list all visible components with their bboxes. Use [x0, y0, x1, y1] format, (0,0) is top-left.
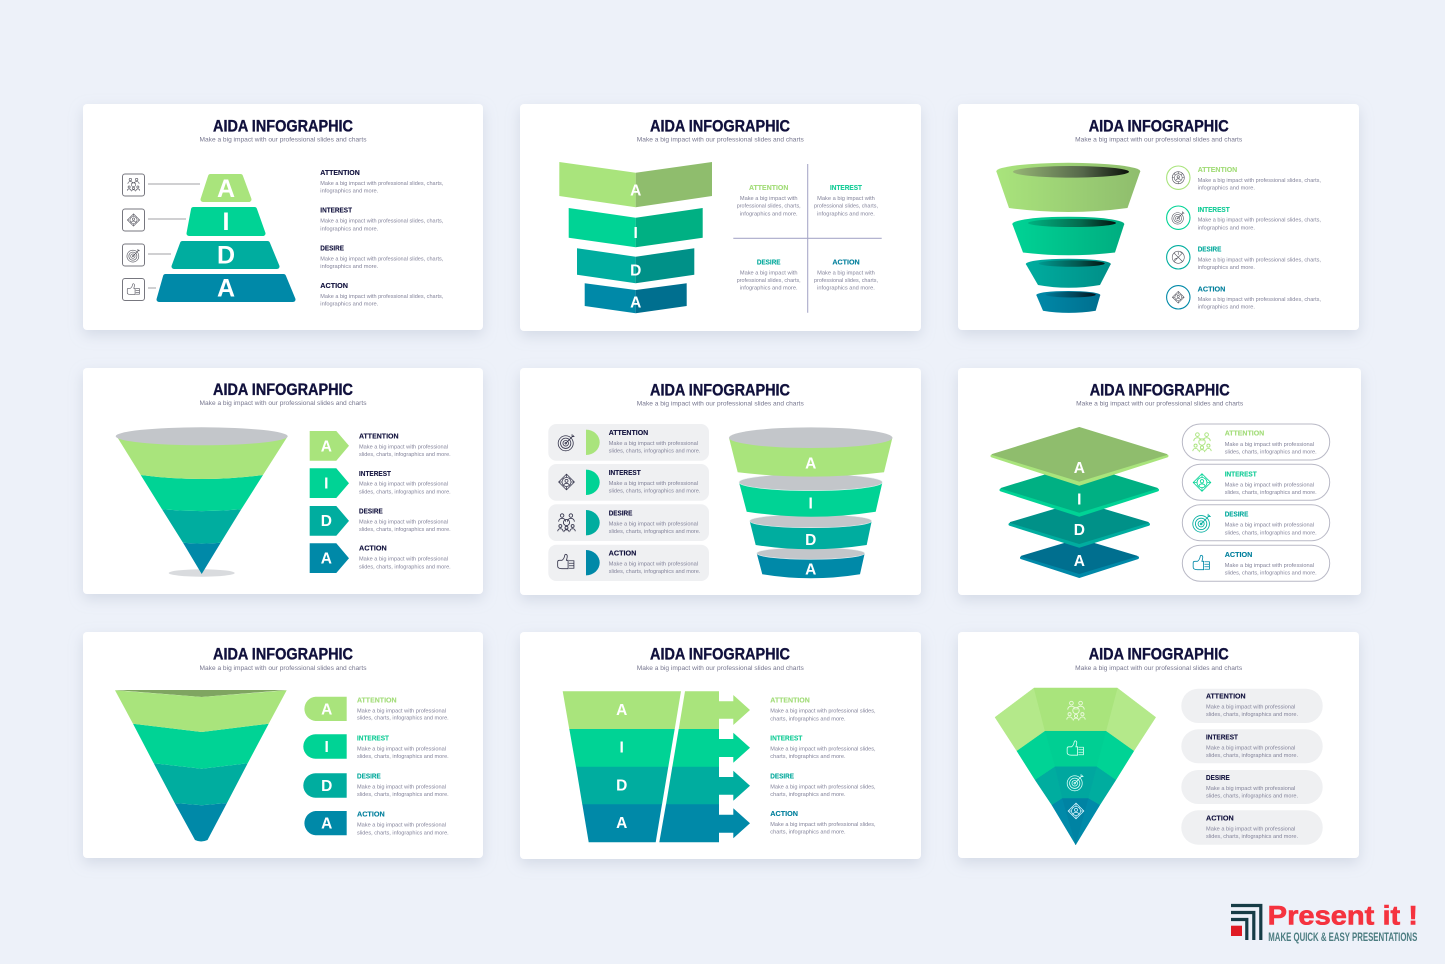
text: interest: infographics and more. — [817, 211, 875, 217]
text: attention: Make a big impact with professional — [1206, 705, 1295, 711]
diamond stack: A — [1074, 460, 1085, 477]
rounded tags: A — [321, 702, 332, 719]
text: desire — [737, 257, 801, 292]
text: interest — [770, 733, 876, 760]
circle icons — [1167, 166, 1190, 309]
text: action: Make a big impact with professional — [1225, 563, 1314, 569]
text: desire: Make a big impact with professional — [1225, 523, 1314, 529]
text: action: ACTION — [357, 810, 385, 819]
text: interest: slides, charts, infographics and more. — [1225, 490, 1317, 496]
logo: Present it — [1231, 900, 1418, 944]
text: desire — [1198, 245, 1321, 271]
panel 1: stacked pyramid — [83, 104, 483, 330]
text: attention: ATTENTION — [1225, 429, 1264, 438]
text: attention: infographics and more. — [740, 211, 798, 217]
text: desire — [357, 772, 449, 798]
title: AIDA INFOGRAPHIC — [213, 646, 353, 664]
text: action: Make a big impact with professional slides, charts, — [320, 294, 444, 300]
text: interest: slides, charts, infographics and more. — [1206, 753, 1298, 759]
text: desire: DESIRE — [320, 243, 344, 252]
text: attention — [770, 696, 876, 722]
subtitle: Make a big impact with our professional slides and charts — [200, 137, 366, 144]
gem chart — [995, 688, 1156, 845]
text: action — [1206, 813, 1298, 840]
subtitle: Make a big impact with our professional slides and charts — [637, 665, 804, 672]
text: interest: Make a big impact with professional slides, charts, — [1198, 218, 1321, 224]
text: action: slides, charts, infographics and more. — [1206, 834, 1298, 840]
text: desire: Make a big impact with professional slides, charts, — [1198, 257, 1321, 263]
text: attention: professional slides, charts, — [737, 204, 801, 210]
chevron stack — [559, 162, 712, 313]
text: attention — [1206, 692, 1298, 718]
panel 5: gray rows and funnel rings — [520, 368, 921, 595]
text: action: Make a big impact with professional — [609, 561, 698, 567]
text: desire — [320, 243, 444, 270]
split funnel: D — [616, 777, 627, 794]
text: desire — [359, 506, 451, 533]
text: interest: slides, charts, infographics and more. — [359, 489, 451, 495]
text: desire: infographics and more. — [1198, 265, 1255, 271]
text: interest — [1225, 469, 1317, 496]
gray pills — [1181, 689, 1323, 845]
text: interest — [320, 206, 444, 232]
split funnel: A — [616, 702, 627, 719]
text: interest: slides, charts, infographics and more. — [609, 489, 701, 495]
text: interest: charts, infographics and more. — [770, 754, 846, 760]
text: action: slides, charts, infographics and more. — [1225, 571, 1317, 577]
panel 4: inverted cone — [83, 368, 483, 594]
title: AIDA INFOGRAPHIC — [213, 118, 353, 136]
text: attention: Make a big impact with professional — [359, 444, 448, 450]
text: action: Make a big impact with professional — [359, 557, 448, 563]
chevron stack: A — [630, 294, 641, 311]
text: interest — [1198, 205, 1321, 231]
text: action: ACTION — [770, 809, 798, 818]
text: attention: slides, charts, infographics and more. — [1225, 449, 1317, 455]
text: action: Make a big impact with professional — [1206, 826, 1295, 832]
text: action: Make a big impact with professional slides, charts, — [1198, 297, 1321, 303]
text: desire: DESIRE — [1225, 510, 1249, 519]
text: action: ACTION — [1225, 550, 1252, 559]
funnel rings: A — [805, 561, 816, 578]
text: attention: slides, charts, infographics and more. — [1206, 712, 1298, 718]
pyramid chart: I — [223, 208, 229, 236]
funnel rings: D — [805, 532, 816, 549]
split funnel: A — [616, 815, 627, 832]
text: desire: infographics and more. — [740, 286, 798, 292]
text: attention: Make a big impact with professional — [609, 441, 698, 447]
text: desire: DESIRE — [609, 508, 633, 517]
text: attention: Make a big impact with professional — [1225, 442, 1314, 448]
text: interest: INTEREST — [1206, 732, 1239, 741]
subtitle: Make a big impact with our professional slides and charts — [200, 400, 366, 407]
panel 9: gem funnel — [958, 632, 1359, 858]
text: action: charts, infographics and more. — [770, 830, 846, 836]
text: desire: professional slides, charts, — [737, 278, 801, 284]
text: desire: slides, charts, infographics and more. — [1206, 794, 1298, 800]
panel 2: folded chevrons — [520, 104, 921, 331]
text: action — [770, 809, 876, 836]
pyramid chart — [159, 175, 293, 302]
text: interest: Make a big impact with professional — [1206, 745, 1295, 751]
text: desire: Make a big impact with professional — [1206, 786, 1295, 792]
text: interest: Make a big impact with professional slides, — [770, 747, 876, 753]
text: attention — [1225, 429, 1317, 455]
panel 6: stacked diamonds — [958, 368, 1361, 595]
text: action — [357, 810, 449, 836]
title: AIDA INFOGRAPHIC — [213, 381, 353, 399]
text: interest: Make a big impact with professional slides, charts, — [320, 219, 444, 225]
diamond stack: D — [1074, 522, 1085, 539]
split funnel — [563, 691, 681, 842]
pyramid chart: D — [217, 242, 235, 270]
icon column with leader lines — [122, 174, 200, 300]
text: interest — [359, 469, 451, 495]
text: attention: charts, infographics and more. — [770, 716, 846, 722]
text: attention: ATTENTION — [609, 428, 648, 437]
subtitle: Make a big impact with our professional slides and charts — [200, 665, 366, 672]
text: desire: Make a big impact with professional — [609, 521, 698, 527]
chevron stack: A — [630, 182, 641, 200]
text: interest: professional slides, charts, — [814, 204, 878, 210]
text: action — [609, 548, 701, 575]
text: attention: ATTENTION — [320, 168, 360, 177]
text: desire: DESIRE — [359, 506, 383, 515]
text: action: ACTION — [359, 544, 387, 553]
text: attention — [737, 183, 801, 217]
text: action: infographics and more. — [320, 302, 379, 308]
panel 7: angular funnel — [83, 632, 483, 858]
funnel rings: A — [805, 455, 816, 472]
text: attention — [1198, 165, 1321, 192]
text: action — [814, 257, 878, 292]
text: desire: slides, charts, infographics and more. — [609, 529, 701, 535]
text: desire: Make a big impact with — [740, 270, 798, 276]
text: action: ACTION — [320, 281, 348, 290]
rounded tags — [303, 697, 347, 835]
text: attention: ATTENTION — [749, 183, 788, 192]
text: interest: slides, charts, infographics and more. — [357, 754, 449, 760]
rounded tags: D — [321, 778, 332, 795]
diamond stack — [992, 428, 1167, 576]
title: AIDA INFOGRAPHIC — [1090, 381, 1230, 399]
text: interest: Make a big impact with professional — [1225, 482, 1314, 488]
pyramid chart: A — [217, 274, 235, 302]
funnel rings: I — [809, 496, 813, 513]
text: attention: ATTENTION — [770, 696, 810, 705]
text: interest — [814, 183, 878, 217]
text: attention: ATTENTION — [357, 695, 396, 704]
row backgrounds with half circles and icons — [548, 424, 709, 581]
title: AIDA INFOGRAPHIC — [1089, 118, 1229, 136]
outlined pills with icons — [1182, 424, 1330, 581]
title: AIDA INFOGRAPHIC — [650, 118, 790, 136]
title: AIDA INFOGRAPHIC — [650, 646, 790, 664]
logo: Present it: Present it ! — [1268, 900, 1418, 930]
text: attention — [609, 428, 701, 455]
funnel chart — [115, 690, 287, 842]
text: action: Make a big impact with professional — [357, 823, 446, 829]
text: action: slides, charts, infographics and more. — [609, 569, 701, 575]
panel 8: split funnel with arrows — [520, 632, 921, 859]
text: desire — [1206, 773, 1298, 800]
chevron stack: D — [630, 262, 641, 280]
text: attention: slides, charts, infographics and more. — [609, 449, 701, 455]
text: attention — [320, 168, 444, 195]
diamond stack: I — [1077, 492, 1081, 508]
pyramid chart: A — [217, 175, 235, 203]
text: interest: INTEREST — [357, 733, 390, 742]
text: attention: infographics and more. — [1198, 186, 1255, 192]
subtitle: Make a big impact with our professional slides and charts — [637, 401, 804, 408]
diamond stack: A — [1074, 553, 1085, 570]
text: desire: Make a big impact with professional — [359, 519, 448, 525]
text: attention — [357, 695, 449, 722]
title: AIDA INFOGRAPHIC — [650, 381, 790, 399]
text: attention: Make a big impact with professional slides, charts, — [320, 181, 444, 187]
text: attention: infographics and more. — [320, 189, 379, 195]
text: interest — [1206, 732, 1298, 759]
subtitle: Make a big impact with our professional slides and charts — [1075, 137, 1242, 144]
text: desire: infographics and more. — [320, 264, 379, 270]
arrow tags: I — [324, 476, 328, 493]
subtitle: Make a big impact with our professional slides and charts — [1076, 401, 1243, 408]
text: interest: INTEREST — [320, 206, 353, 215]
text: action — [1225, 550, 1317, 577]
text: action — [359, 544, 451, 570]
text: action: ACTION — [832, 257, 860, 266]
text: attention: ATTENTION — [1198, 165, 1237, 174]
text: desire: DESIRE — [357, 772, 381, 781]
panel 3: 3D cups funnel — [958, 104, 1359, 330]
text: attention — [359, 431, 451, 458]
3D funnel — [996, 163, 1140, 313]
text: interest: Make a big impact with professional — [359, 482, 448, 488]
text: attention: slides, charts, infographics and more. — [359, 452, 451, 458]
text: attention: Make a big impact with — [740, 196, 798, 202]
text: action — [320, 281, 444, 308]
text: action: ACTION — [1198, 284, 1225, 293]
text: action: ACTION — [1206, 813, 1234, 822]
text: desire: slides, charts, infographics and more. — [359, 527, 451, 533]
subtitle: Make a big impact with our professional slides and charts — [637, 137, 804, 144]
text: desire — [1225, 510, 1317, 536]
arrow tags: D — [321, 513, 332, 530]
text: interest — [357, 733, 449, 760]
funnel rings — [729, 427, 892, 578]
rounded tags: I — [325, 739, 329, 756]
text: attention: Make a big impact with professional slides, — [770, 709, 876, 715]
text: action: professional slides, charts, — [814, 278, 878, 284]
text: interest: INTEREST — [770, 733, 803, 742]
text: action — [1198, 284, 1321, 311]
rounded tags: A — [321, 816, 332, 833]
text: interest: INTEREST — [359, 469, 392, 478]
text: action: slides, charts, infographics and more. — [357, 830, 449, 836]
text: action: infographics and more. — [817, 286, 875, 292]
text: attention: ATTENTION — [359, 431, 398, 440]
text: attention: slides, charts, infographics and more. — [357, 716, 449, 722]
chevron stack: I — [634, 225, 638, 242]
text: desire: Make a big impact with professional slides, charts, — [320, 256, 444, 262]
text: interest: Make a big impact with professional — [357, 746, 446, 752]
text: desire: slides, charts, infographics and more. — [357, 792, 449, 798]
text: desire — [770, 771, 876, 798]
text: action: Make a big impact with — [817, 270, 875, 276]
text: interest: Make a big impact with — [817, 196, 875, 202]
text: desire: DESIRE — [1206, 773, 1230, 782]
text: desire: charts, infographics and more. — [770, 792, 846, 798]
text: attention: Make a big impact with professional slides, charts, — [1198, 178, 1321, 184]
text: interest: INTEREST — [1225, 469, 1257, 478]
text: interest: INTEREST — [1198, 205, 1230, 214]
text: interest: INTEREST — [609, 468, 641, 477]
text: attention: Make a big impact with professional — [357, 708, 446, 714]
cone chart — [116, 427, 288, 577]
text: action: slides, charts, infographics and more. — [359, 564, 451, 570]
arrow tags — [310, 431, 349, 573]
arrows — [659, 691, 750, 842]
text: interest: infographics and more. — [320, 226, 379, 232]
text: desire — [609, 508, 701, 535]
text: action: Make a big impact with professional slides, — [770, 822, 876, 828]
text: desire: DESIRE — [770, 771, 794, 780]
text: attention: ATTENTION — [1206, 692, 1246, 701]
arrow tags: A — [321, 438, 332, 455]
text: desire: Make a big impact with professional slides, — [770, 784, 876, 790]
text: action: infographics and more. — [1198, 305, 1255, 311]
text: desire: Make a big impact with professional — [357, 785, 446, 791]
text: action: ACTION — [609, 548, 636, 557]
text: interest — [609, 468, 701, 495]
arrow tags: A — [321, 551, 332, 568]
text: interest: INTEREST — [830, 183, 863, 192]
text: desire: DESIRE — [757, 257, 781, 266]
text: desire: DESIRE — [1198, 245, 1222, 254]
subtitle: Make a big impact with our professional slides and charts — [1075, 665, 1242, 672]
text: interest: Make a big impact with professional — [609, 481, 698, 487]
text: desire: slides, charts, infographics and more. — [1225, 530, 1317, 536]
split funnel: I — [620, 740, 624, 757]
title: AIDA INFOGRAPHIC — [1089, 646, 1229, 664]
text: interest: infographics and more. — [1198, 225, 1255, 231]
